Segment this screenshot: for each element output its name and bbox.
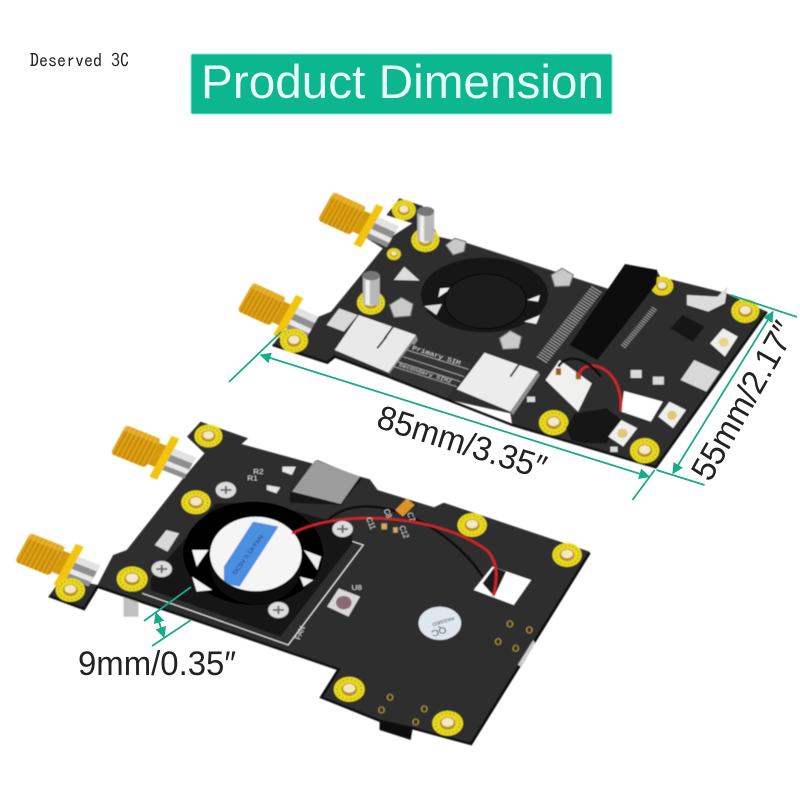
wires	[558, 359, 621, 412]
USB header	[687, 287, 728, 312]
cutout window	[621, 391, 663, 422]
ESD warning triangle	[394, 267, 420, 281]
standoff lower	[357, 271, 385, 315]
board edge shade	[49, 553, 590, 744]
watermark: Deserved 3C: Deserved 3C	[30, 52, 129, 70]
standoff upper	[411, 207, 439, 252]
capacitor and resistor labels: U8	[352, 584, 362, 592]
board outline	[49, 422, 590, 743]
dimension: length 85mm	[229, 332, 655, 500]
board edge shade	[273, 312, 767, 467]
grey connector block	[290, 460, 362, 505]
bottom circuit board (rear view)	[11, 419, 590, 744]
board outline	[273, 198, 767, 467]
capacitor and resistor labels: C12	[397, 524, 411, 539]
antenna connector upper	[107, 419, 201, 488]
cooling fan	[151, 502, 352, 637]
label: Primary SIM: Primary SIM	[411, 345, 461, 368]
fan connector	[546, 360, 592, 412]
capacitor and resistor labels: C8	[381, 508, 394, 519]
title banner	[191, 54, 612, 114]
side switch	[155, 530, 179, 552]
capacitor and resistor labels: C7	[405, 511, 417, 522]
standoff below board	[124, 595, 138, 617]
solder tabs	[267, 467, 296, 493]
push buttons	[608, 328, 738, 447]
mounting pads	[56, 425, 582, 736]
SIM slot labels	[388, 344, 472, 398]
label: 85mm/3.35: 85mm/3.35″	[373, 398, 551, 487]
capacitor and resistor labels: C11	[364, 516, 378, 531]
SIM tray right	[457, 353, 540, 415]
capacitor and resistor labels: FAN	[293, 625, 307, 641]
label: Secondary SIM: Secondary SIM2	[398, 362, 453, 385]
fan with hub	[421, 258, 548, 332]
QC passed sticker	[418, 607, 461, 640]
capacitor and resistor labels: R1	[247, 474, 258, 482]
audio jack	[566, 408, 621, 443]
IC chip	[671, 315, 705, 342]
fan sticker text: DC5V 0.1A FAN	[231, 534, 266, 576]
antenna connector upper	[314, 186, 404, 257]
solder test points	[379, 621, 532, 725]
antenna silk label	[327, 308, 358, 332]
antenna connector lower	[234, 277, 324, 348]
small parts	[381, 523, 398, 533]
LED module	[327, 588, 360, 617]
capacitor	[395, 498, 415, 517]
wires	[292, 506, 496, 596]
USB-C edge	[518, 640, 535, 667]
fan sticker	[210, 517, 302, 591]
SD card tab	[380, 720, 413, 740]
mini PCIe slot	[542, 264, 657, 360]
SIM tray left	[335, 315, 418, 377]
board cutout	[474, 567, 531, 605]
USB-C port	[681, 360, 720, 392]
screws	[151, 482, 353, 618]
antenna connector lower	[11, 527, 105, 596]
capacitor and resistor labels	[247, 468, 417, 641]
hex screws	[389, 238, 573, 349]
capacitor and resistor labels: R2	[253, 468, 264, 476]
dimension: fan height 9mm	[78, 587, 236, 683]
label: 9mm/0.35: 9mm/0.35″	[78, 645, 236, 683]
top circuit board (front view)	[234, 186, 767, 467]
dimension: width 55mm	[656, 295, 800, 487]
fan silkscreen outline	[142, 541, 363, 645]
mounting pads	[280, 200, 759, 463]
QC passed sticker: PASSED	[431, 615, 455, 627]
small components	[527, 370, 664, 452]
QC passed sticker: QC	[430, 625, 448, 639]
title text: Product Dimension	[201, 55, 604, 108]
